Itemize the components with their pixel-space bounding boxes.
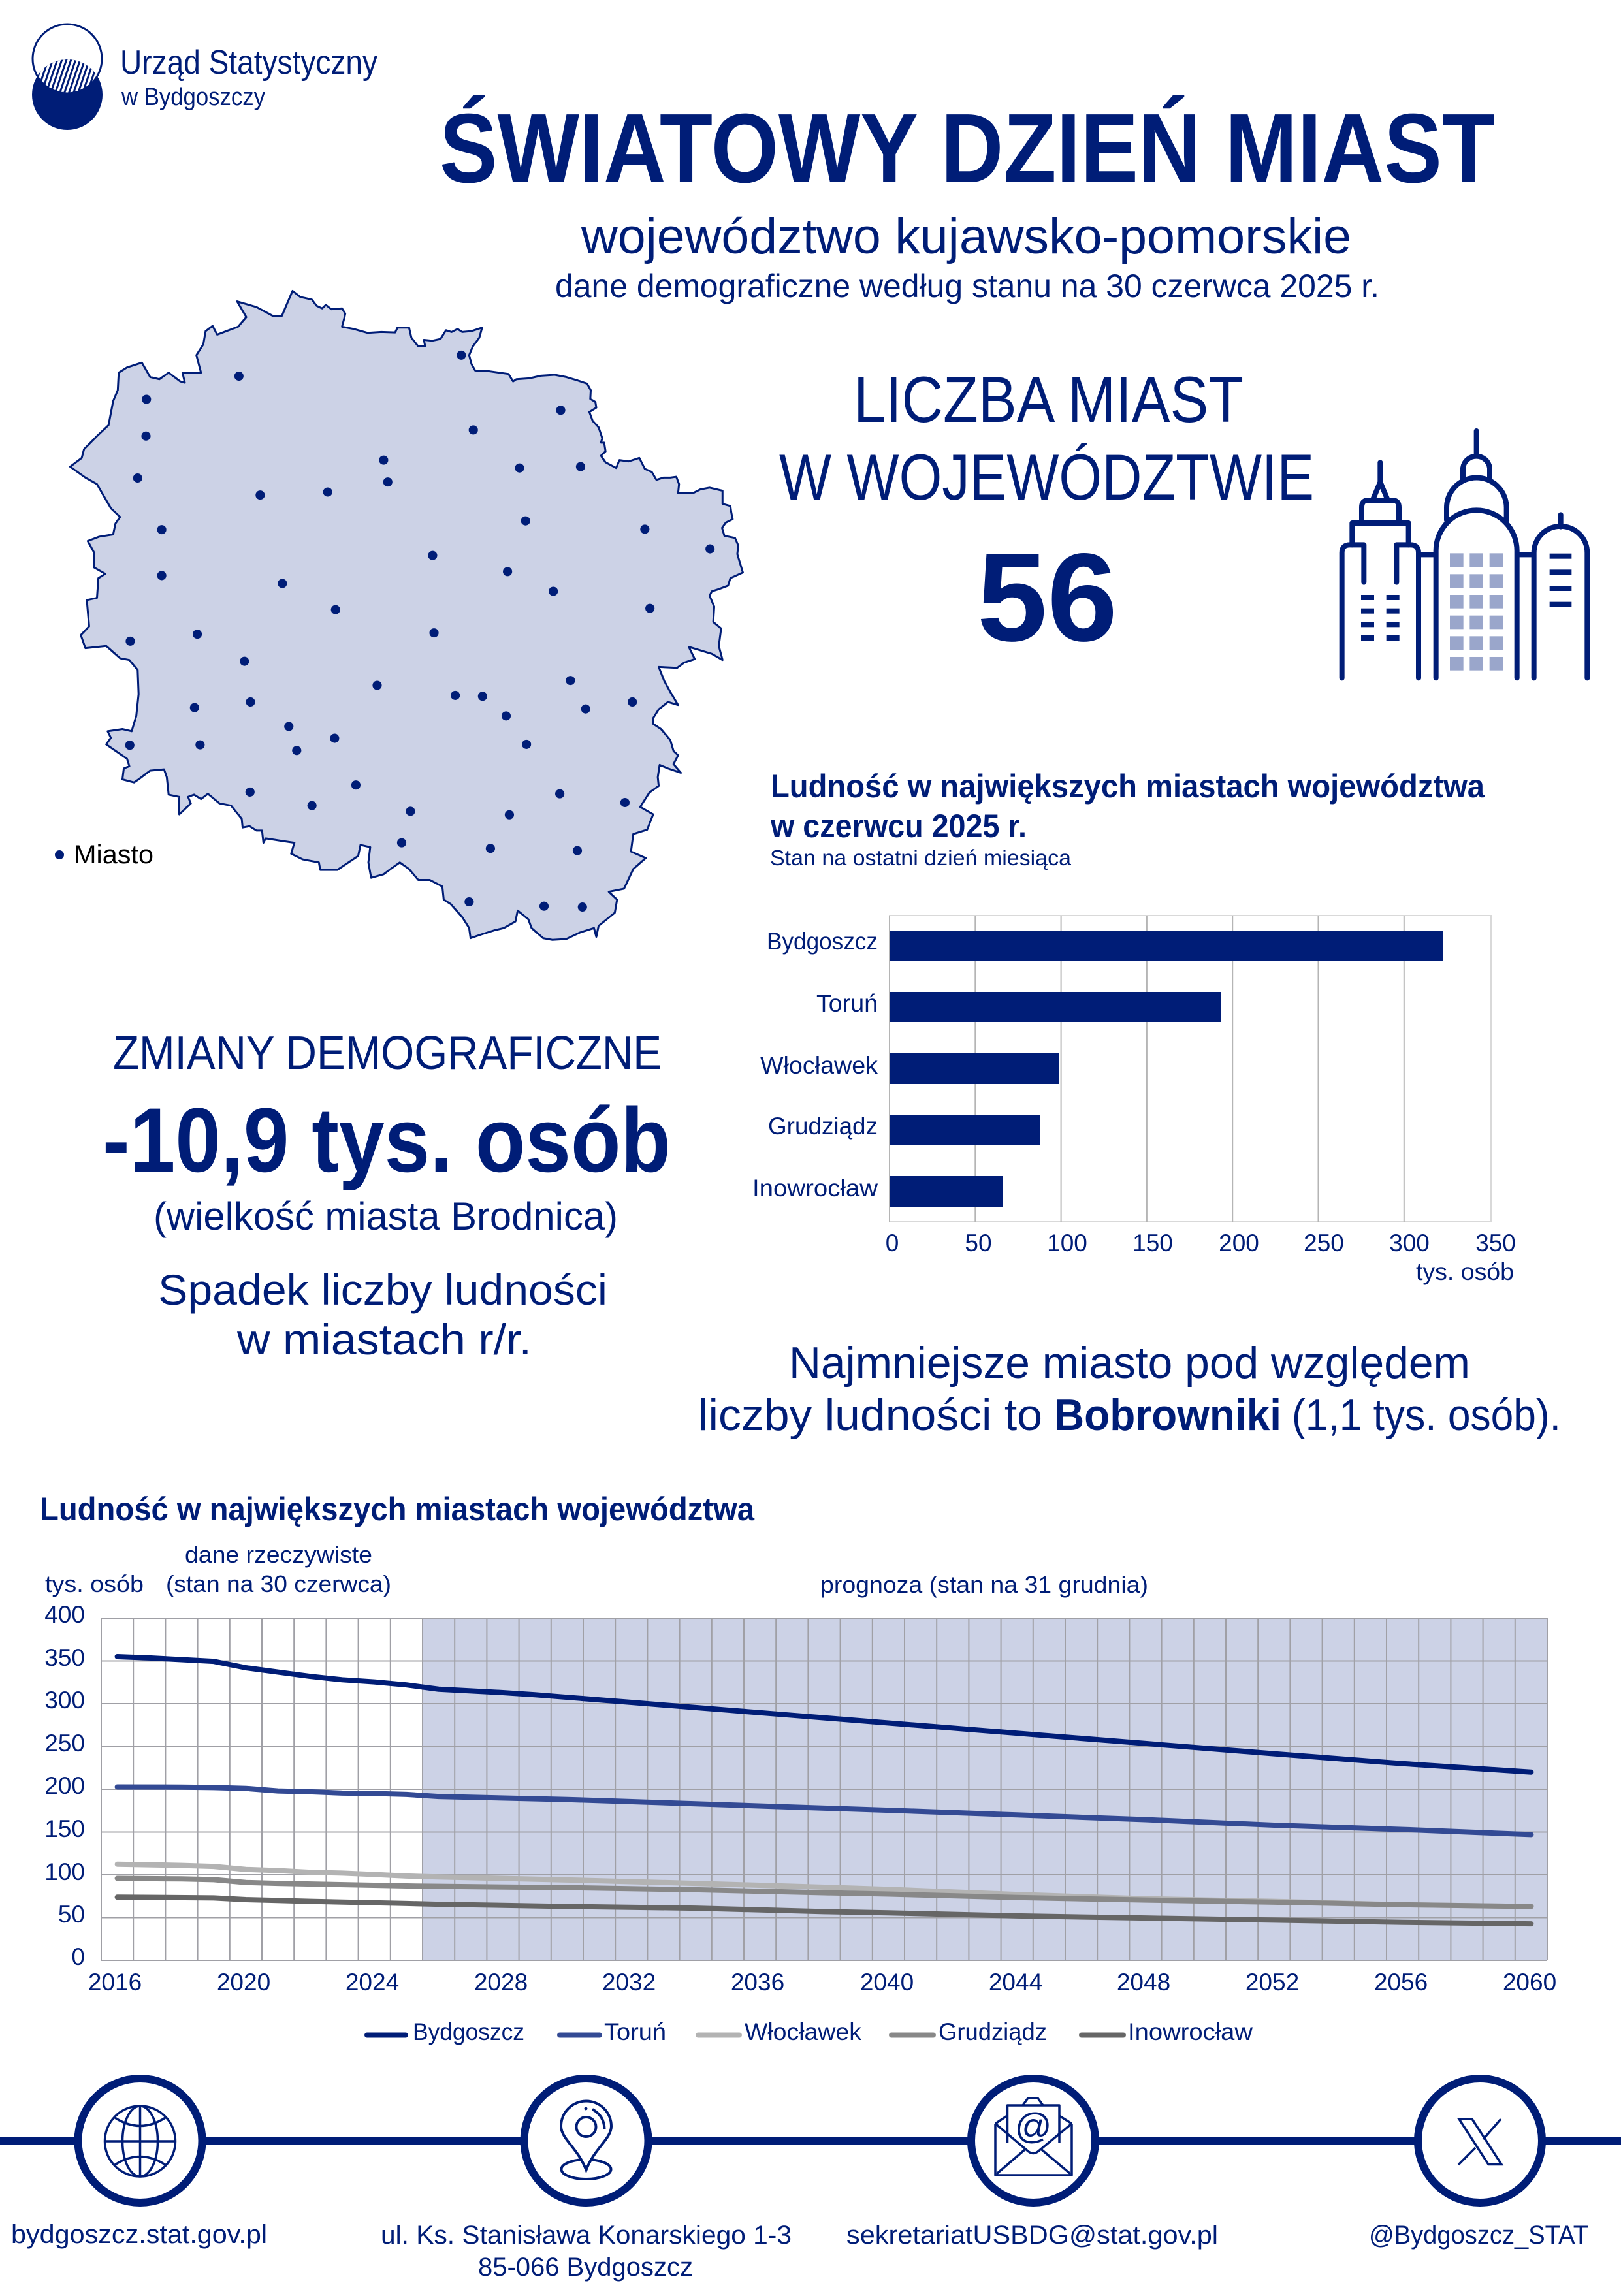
note: size of Brodnica: (wielkość miasta Brodnica) [153,1194,618,1238]
y axis labels: 250 [44,1730,85,1757]
y axis labels: 200 [44,1772,85,1799]
map: city dots [125,351,714,912]
contact: social media: @Bydgoszcz_STAT [1369,2221,1588,2250]
x axis labels: 2040 [860,1969,914,1996]
callout: smallest city: Bobrowniki [1054,1390,1281,1440]
label: axis unit: tys. osób [45,1571,144,1597]
chart lines [118,1657,1531,1924]
icon: logo emblem [26,24,104,130]
axis labels: 150 [1132,1230,1173,1256]
axis labels: 100 [1047,1230,1087,1256]
icon: city skyline [1342,431,1587,678]
subtitle: data date: dane demograficzne według stanu na 30 czerwca 2025 r. [555,268,1379,304]
category labels: Inowrocław [752,1175,878,1202]
x axis labels: 2028 [474,1969,528,1996]
logo: Urząd Statystyczny w Bydgoszczy [26,24,377,130]
contact: website: bydgoszcz.stat.gov.pl [11,2220,267,2249]
label: forecast: prognoza (stan na 31 grudnia) [820,1571,1148,1598]
callout: smallest city: liczby ludności to [698,1390,1042,1440]
category labels [752,928,878,1202]
axis unit: tys. osób [1416,1258,1514,1285]
y axis labels [44,1601,85,1970]
y axis labels: 0 [71,1943,85,1970]
map: cities of the voivodeship [70,291,743,940]
category labels: Włocławek [760,1052,878,1079]
chart legend: Włocławek [745,2018,861,2045]
panel: number of cities [779,363,1314,667]
icon: X logo [1418,2079,1542,2203]
heading: number of cities line 2: W WOJEWÓDZTWIE [779,441,1314,513]
panel: line chart [40,1491,1556,2045]
icon: envelope with at sign: @ [1015,2105,1051,2146]
map legend: Miasto [74,840,153,869]
category labels: Toruń [816,990,878,1017]
x axis labels: 2056 [1374,1969,1428,1996]
contact: email: sekretariatUSBDG@stat.gov.pl [846,2221,1218,2250]
callout: smallest city: (1,1 tys. osób). [1292,1390,1561,1440]
contact: address: 85-066 Bydgoszcz [478,2253,693,2282]
callout: smallest city: Najmniejsze miasto pod względem [789,1338,1470,1388]
logo text: office name: Urząd Statystyczny [120,44,377,82]
axis labels: 300 [1389,1230,1430,1256]
big number: 56: 56 [977,527,1117,667]
label: actual data: dane rzeczywiste [185,1541,372,1568]
text: decrease line 1: Spadek liczby ludności [158,1266,607,1314]
icon: globe [78,2079,202,2203]
label: actual data [166,1541,391,1597]
label: actual data: (stan na 30 czerwca) [166,1571,391,1597]
axis labels: 250 [1304,1230,1344,1256]
heading: number of cities line 1: LICZBA MIAST [854,363,1244,436]
axis labels: 0 [886,1230,899,1256]
category labels: Grudziądz [768,1113,878,1140]
x axis labels: 2060 [1503,1969,1556,1996]
footer: contacts [0,2079,1621,2282]
axis labels: 350 [1475,1230,1516,1256]
x axis labels: 2016 [88,1969,142,1996]
chart legend: Grudziądz [939,2018,1047,2045]
y axis labels: 400 [44,1601,85,1628]
panel: demographic changes [103,1027,671,1363]
bar chart heading line 1: Ludność w największych miastach województwa [771,768,1485,805]
contact: address: ul. Ks. Stanisława Konarskiego 1-3 [381,2221,792,2250]
x axis labels: 2044 [989,1969,1042,1996]
big number: population change: -10,9 tys. osób [103,1089,671,1191]
logo text: city: w Bydgoszczy [121,84,265,111]
icon: envelope with at sign [971,2079,1095,2203]
y axis labels: 350 [44,1644,85,1671]
x axis labels [88,1969,1556,1996]
callout: smallest city [698,1338,1561,1440]
axis labels: 200 [1219,1230,1259,1256]
y axis labels: 100 [44,1858,85,1885]
text: decrease line 2: w miastach r/r. [236,1315,532,1363]
heading: demographic changes: ZMIANY DEMOGRAFICZNE [113,1027,662,1079]
x axis labels: 2020 [217,1969,270,1996]
chart legend: Inowrocław [1128,2018,1253,2045]
x axis labels: 2048 [1117,1969,1170,1996]
map outline [70,291,743,940]
category labels: Bydgoszcz [767,928,878,955]
title: ŚWIATOWY DZIEŃ MIAST [440,93,1495,203]
bar chart heading line 2: w czerwcu 2025 r. [770,808,1027,844]
x axis labels: 2032 [602,1969,656,1996]
chart legend [367,2018,1253,2045]
x axis labels: 2036 [731,1969,784,1996]
icon: location pin [524,2079,648,2203]
contact: address [381,2221,792,2282]
x axis labels: 2052 [1245,1969,1299,1996]
axis labels [886,1230,1516,1256]
bar chart note: Stan na ostatni dzień miesiąca [770,846,1072,870]
y axis labels: 300 [44,1687,85,1714]
y axis labels: 150 [44,1815,85,1842]
bars [890,931,1443,1207]
subtitle: region: województwo kujawsko-pomorskie [581,209,1351,264]
line chart heading: Ludność w największych miastach województwa [40,1491,755,1527]
x axis labels: 2024 [345,1969,399,1996]
chart legend: Toruń [604,2018,666,2045]
chart legend: Bydgoszcz [413,2018,524,2045]
axis labels: 50 [965,1230,992,1256]
panel: bar chart of largest cities [752,768,1516,1285]
y axis labels: 50 [58,1901,85,1928]
forecast shaded area [423,1618,1547,1960]
